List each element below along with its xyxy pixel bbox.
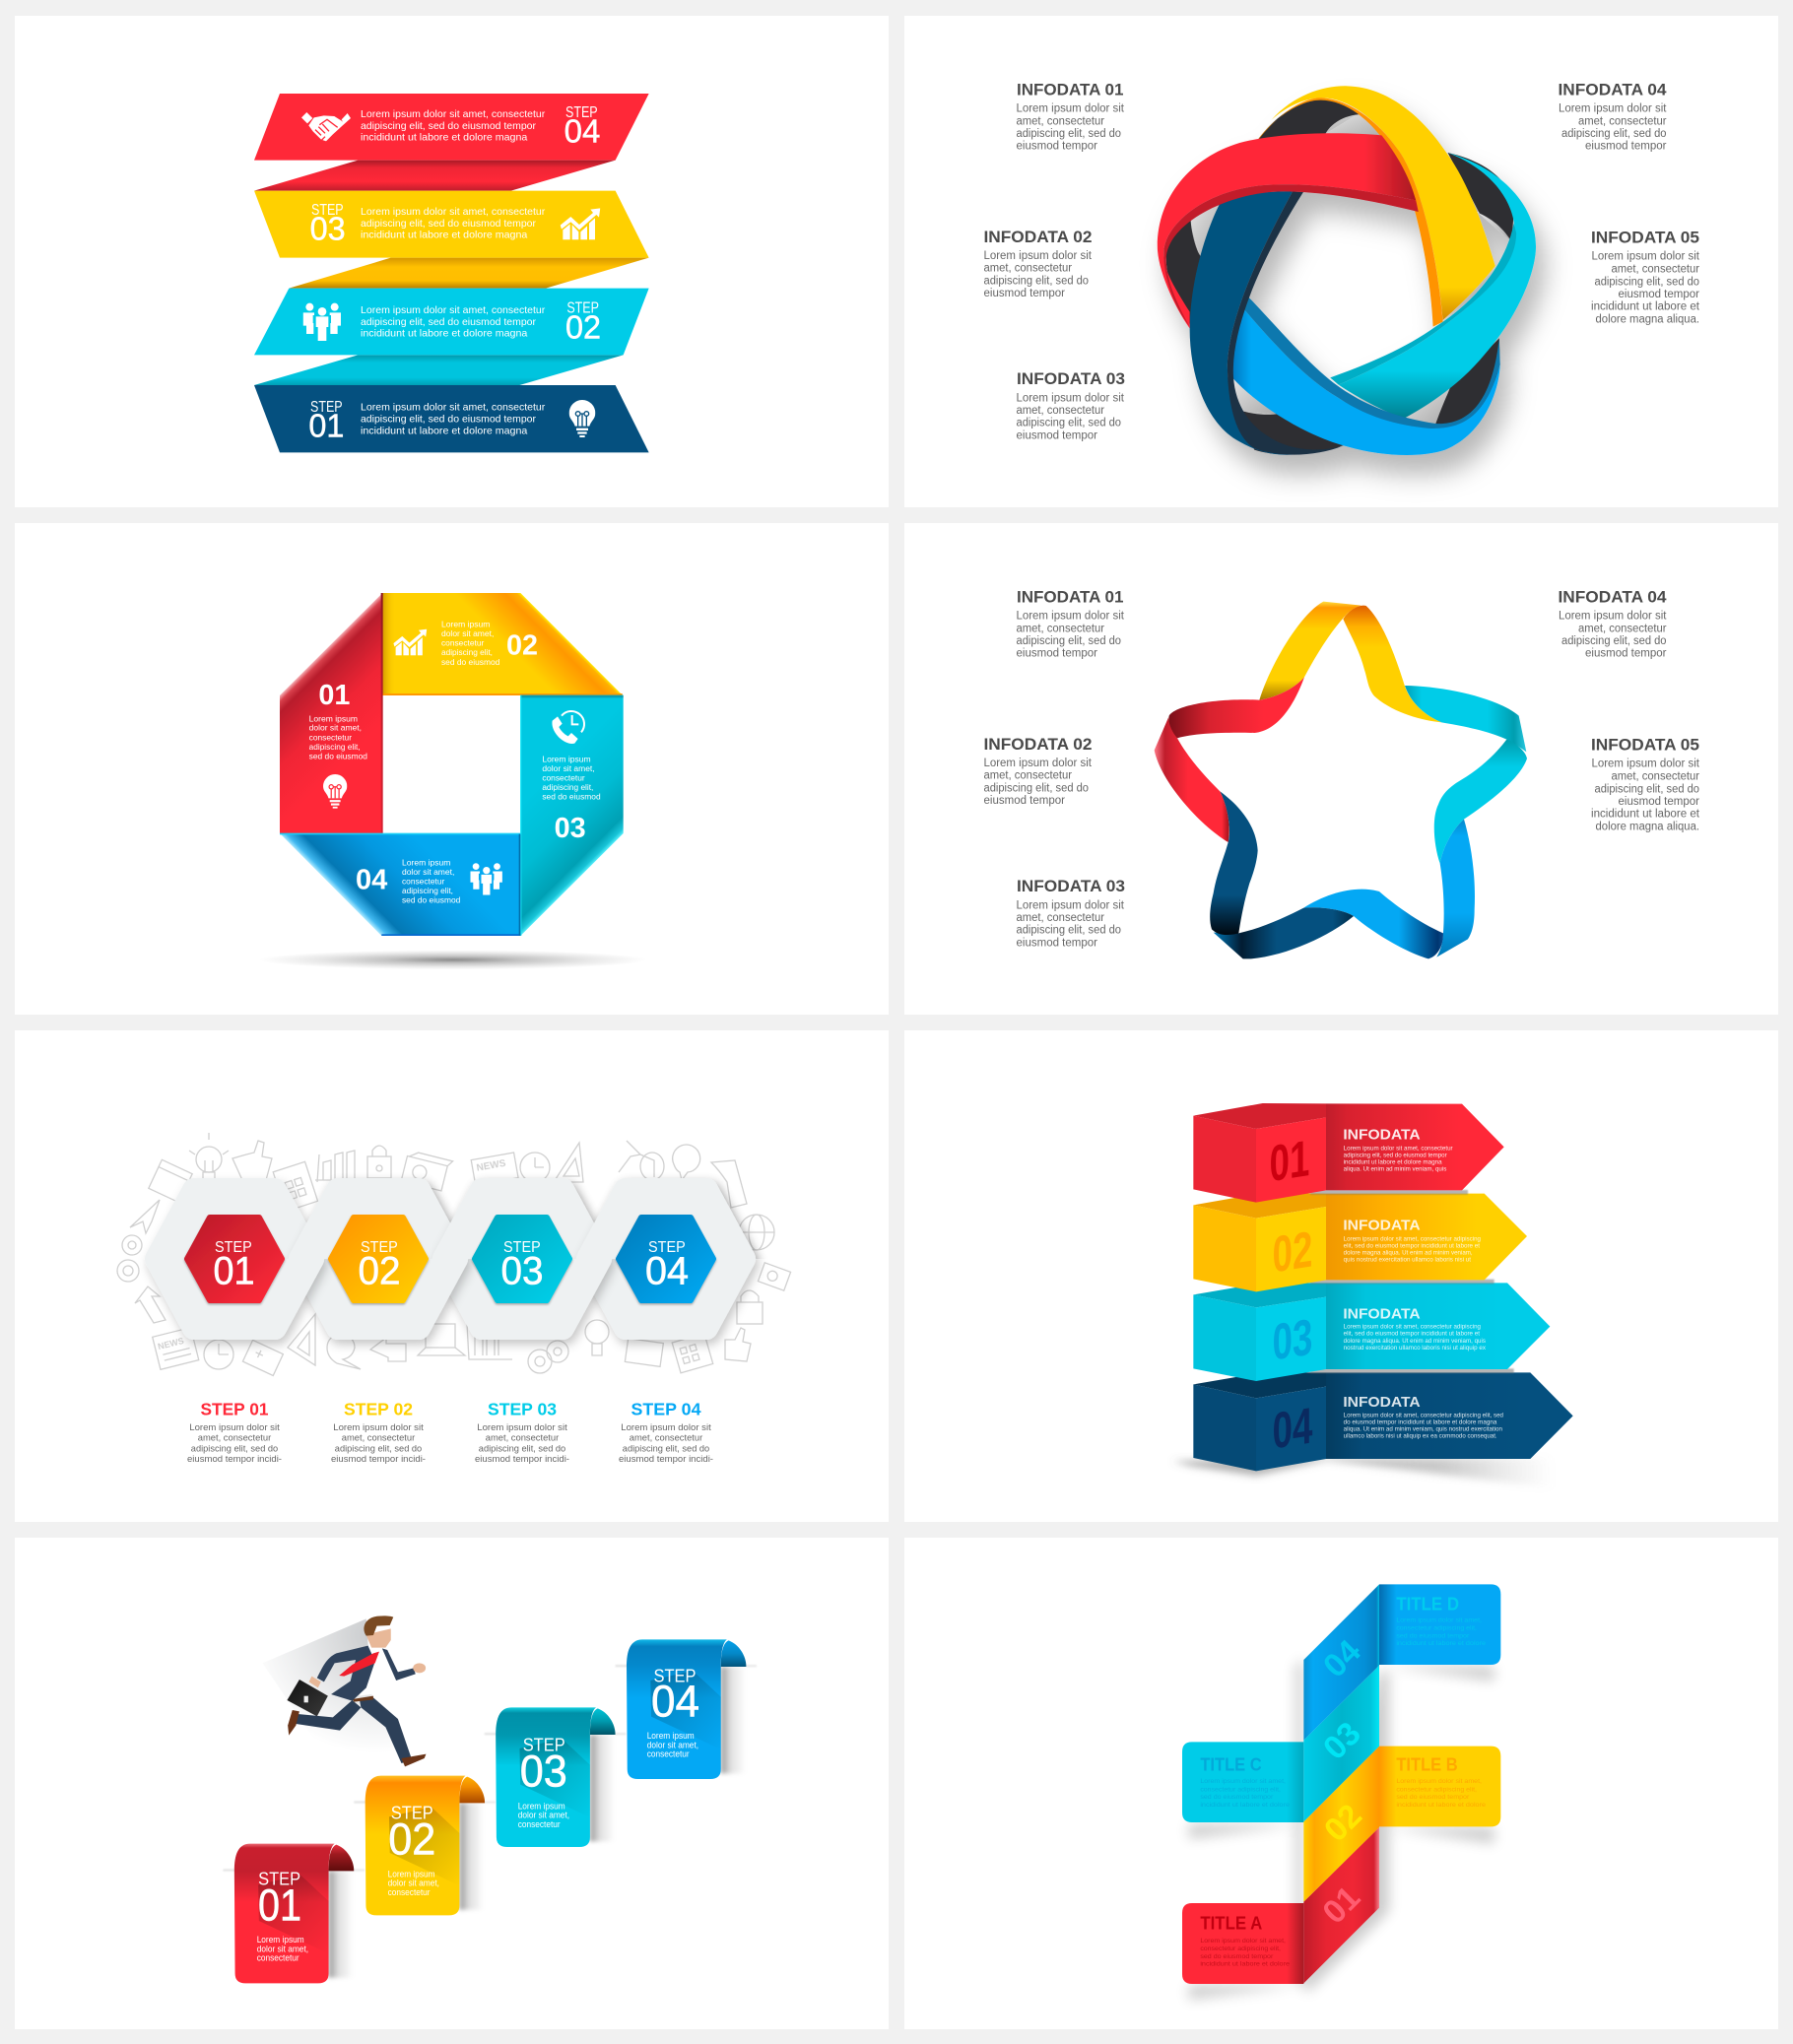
- segment text: [542, 754, 601, 802]
- caption step 01: STEP 01: [201, 1400, 269, 1419]
- text: infodata 01: INFODATA 01: [1017, 82, 1123, 99]
- hexagon step 01: STEP: [215, 1239, 252, 1256]
- ribbon step 02: [354, 1776, 496, 1915]
- caption step 01: [187, 1400, 282, 1465]
- text: infodata 05: adipiscing elit, sed do: [1594, 276, 1699, 288]
- panel: folded octagon: [15, 523, 889, 1015]
- text: infodata 02: [983, 229, 1093, 299]
- text: infodata 05: [1591, 737, 1700, 832]
- ribbon 03 text: STEP: [523, 1734, 565, 1754]
- arrow text: dolore magna aliqua. Ut enim ad minim veniam,: [1344, 1249, 1473, 1256]
- strip segment 01: [1303, 1827, 1379, 1983]
- text: infodata 05: dolore magna aliqua.: [1596, 821, 1699, 832]
- segment text: adipiscing elit,: [309, 742, 361, 752]
- ribbon 04 text: Lorem ipsum: [647, 1731, 695, 1742]
- ring band: cyan: [1330, 153, 1536, 419]
- ground shadow: [259, 950, 647, 969]
- ring band: navy: [1190, 191, 1343, 455]
- caption step 04: adipiscing elit, sed do: [623, 1443, 709, 1454]
- icon: light bulb: [323, 774, 347, 809]
- arrow text: do eiusmod tempor incididunt ut labore et dolore magna: [1344, 1419, 1497, 1426]
- band text: adipiscing elit, sed do eiusmod tempor: [361, 219, 537, 230]
- number 02: 02: [506, 630, 538, 662]
- card: title a: [1182, 1903, 1303, 1984]
- band text: [361, 109, 546, 144]
- band text: adipiscing elit, sed do eiusmod tempor: [361, 317, 537, 328]
- segment 03: teal: [520, 695, 624, 936]
- band text: incididunt ut labore et dolore magna: [361, 329, 528, 340]
- band text: [361, 403, 546, 436]
- step number 02: STEP: [566, 299, 599, 316]
- segment 01: red: [280, 593, 383, 833]
- text: infodata 04: amet, consectetur: [1578, 623, 1667, 634]
- number 03: 03: [1273, 1309, 1312, 1372]
- hexagon step 03: STEP: [503, 1239, 541, 1256]
- card: title b: Lorem ipsum dolor sit amet,: [1396, 1778, 1482, 1785]
- segment text: consectetur: [441, 638, 485, 648]
- arrow text: adipiscing elit, sed do eiusmod tempor: [1344, 1152, 1447, 1158]
- text: infodata 05: incididunt ut labore et: [1591, 301, 1700, 313]
- step number 03: STEP: [311, 202, 344, 219]
- caption step 01: eiusmod tempor incidi-: [187, 1454, 282, 1465]
- segment text: sed do eiusmod: [309, 752, 367, 761]
- number 04: 04: [1273, 1397, 1312, 1461]
- step number 01: 01: [308, 408, 344, 444]
- ribbon 01 text: [257, 1868, 308, 1964]
- ribbon 04 text: [647, 1666, 699, 1760]
- text: infodata 05: amet, consectetur: [1612, 770, 1699, 782]
- text: infodata 04: eiusmod tempor: [1585, 141, 1667, 153]
- text: infodata 04: [1559, 589, 1667, 660]
- strip segment 02: 02: [1317, 1798, 1369, 1849]
- segment text: consectetur: [309, 732, 352, 742]
- ribbon step 01: [223, 1844, 365, 1983]
- text: infodata 03: Lorem ipsum dolor sit: [1017, 899, 1125, 911]
- caption step 03: [475, 1400, 569, 1465]
- caption step 04: [619, 1400, 713, 1465]
- band: step 01: [254, 385, 649, 452]
- segment 04: blue: [280, 833, 520, 936]
- caption step 03: adipiscing elit, sed do: [479, 1443, 565, 1454]
- ring dark underside: [1165, 99, 1514, 454]
- arrow text: [1343, 1127, 1453, 1173]
- card: title c: incididunt ut labore et dolore: [1200, 1802, 1290, 1809]
- panel: woven ring: [904, 16, 1778, 507]
- icon: growth chart: [393, 629, 427, 655]
- caption step 03: eiusmod tempor incidi-: [475, 1454, 569, 1465]
- star ribbon diagram: [1155, 602, 1527, 958]
- arrow text: elit, sed do eiusmod tempor incididunt ut labore et: [1344, 1331, 1480, 1338]
- businessman figure: [287, 1615, 426, 1766]
- strip segment 04: 04: [1316, 1633, 1368, 1684]
- band text: incididunt ut labore et dolore magna: [361, 426, 528, 436]
- text: infodata 02: amet, consectetur: [983, 263, 1072, 275]
- ribbon 01 text: dolor sit amet,: [257, 1944, 308, 1954]
- panel: step ribbon bands: [15, 16, 889, 507]
- ground shadow: [1172, 1458, 1554, 1488]
- arrow text: Lorem ipsum dolor sit amet, consectetur adipiscing: [1344, 1324, 1481, 1331]
- card: title c: Lorem ipsum dolor sit amet,: [1200, 1778, 1286, 1785]
- motion shadow behind runner: [262, 1618, 405, 1793]
- icon: light bulb: [569, 400, 595, 437]
- number 03: 03: [555, 813, 586, 844]
- caption step 04: STEP 04: [631, 1400, 701, 1419]
- text: infodata 03: [1017, 370, 1125, 441]
- text: infodata 05: eiusmod tempor: [1618, 289, 1699, 300]
- text: infodata 01: Lorem ipsum dolor sit: [1017, 102, 1125, 114]
- panel: running businessman on ribbon steps: [15, 1538, 889, 2029]
- text: infodata 02: eiusmod tempor: [983, 288, 1065, 299]
- ribbon 04 text: STEP: [654, 1666, 696, 1686]
- card: title d: [1379, 1584, 1500, 1665]
- band text: adipiscing elit, sed do eiusmod tempor: [361, 121, 537, 132]
- segment text: adipiscing elit,: [402, 886, 453, 895]
- caption step 02: amet, consectetur: [342, 1433, 415, 1444]
- arrow text: [1343, 1305, 1487, 1352]
- text: infodata 05: INFODATA 05: [1591, 737, 1699, 755]
- background doodle icons: NEWS: [157, 1336, 185, 1352]
- background doodle icons: NEWS: [476, 1158, 507, 1174]
- panel: ribbon star: [904, 523, 1778, 1015]
- text: infodata 01: adipiscing elit, sed do: [1017, 128, 1121, 140]
- arrow text: Lorem ipsum dolor sit amet, consectetur adipiscing elit, sed: [1344, 1413, 1503, 1419]
- band: step 03: [254, 191, 649, 258]
- text: infodata 02: [983, 736, 1093, 807]
- text: infodata 04: [1559, 82, 1667, 153]
- background doodle icons: [117, 1133, 791, 1375]
- card: title b: [1379, 1747, 1500, 1826]
- panel: 3d box arrows: [904, 1030, 1778, 1522]
- band fold: cyan: [254, 355, 624, 385]
- ribbon 01 text: STEP: [258, 1868, 300, 1888]
- text: infodata 05: incididunt ut labore et: [1591, 809, 1700, 821]
- segment text: [402, 857, 461, 905]
- ring band: yellow: [1254, 86, 1495, 327]
- number 02: 02: [1273, 1221, 1312, 1285]
- step number 02: 02: [565, 309, 601, 346]
- text: infodata 03: eiusmod tempor: [1017, 937, 1097, 949]
- card: title d: incididunt ut labore et dolore: [1396, 1640, 1486, 1647]
- segment text: [441, 620, 500, 667]
- text: infodata 04: INFODATA 04: [1559, 82, 1667, 99]
- hexagon step 02: STEP: [361, 1239, 398, 1256]
- caption step 02: [331, 1400, 426, 1465]
- arrow text: ullamco laboris nisi ut aliquip ex ea commodo consequat.: [1344, 1433, 1497, 1440]
- text: infodata 01: adipiscing elit, sed do: [1017, 635, 1121, 647]
- card: title c: TITLE C: [1200, 1754, 1262, 1775]
- text: infodata 02: Lorem ipsum dolor sit: [983, 250, 1093, 262]
- band text: Lorem ipsum dolor sit amet, consectetur: [361, 109, 546, 120]
- ribbon 03 text: 03: [520, 1746, 567, 1796]
- ribbon 01 text: consectetur: [257, 1953, 299, 1964]
- arrow text: INFODATA: [1343, 1394, 1421, 1411]
- segment text: sed do eiusmod: [542, 792, 601, 802]
- text: infodata 05: INFODATA 05: [1591, 230, 1699, 247]
- card: title a: incididunt ut labore et dolore: [1200, 1961, 1290, 1968]
- segment text: Lorem ipsum: [309, 713, 358, 723]
- text: infodata 03: INFODATA 03: [1017, 878, 1125, 895]
- segment text: sed do eiusmod: [441, 657, 500, 667]
- segment text: dolor sit amet,: [309, 723, 362, 733]
- large hexagons: [157, 1190, 744, 1328]
- segment text: adipiscing elit,: [542, 782, 593, 792]
- step number 04: STEP: [565, 104, 598, 121]
- hexagon step 03: 03: [500, 1249, 544, 1292]
- text: infodata 03: adipiscing elit, sed do: [1017, 418, 1121, 429]
- arrow text: Lorem ipsum dolor sit amet, consectetur: [1344, 1145, 1453, 1152]
- text: infodata 05: Lorem ipsum dolor sit: [1592, 251, 1700, 263]
- arrow row 01: [1193, 1103, 1504, 1203]
- text: infodata 05: adipiscing elit, sed do: [1594, 783, 1699, 795]
- segment text: [309, 713, 367, 761]
- segment text: dolor sit amet,: [402, 867, 454, 877]
- text: infodata 01: amet, consectetur: [1017, 623, 1104, 634]
- number 01: 01: [1270, 1130, 1309, 1193]
- arrow text: aliqua. Ut enim ad minim veniam, quis nostrud exercitation: [1344, 1426, 1502, 1433]
- card: title b: sed do eiusmod tempor: [1396, 1794, 1470, 1801]
- caption step 03: Lorem ipsum dolor sit: [477, 1422, 567, 1433]
- card: title c: consectetur adipiscing elit,: [1200, 1786, 1281, 1793]
- ribbon 02 text: consectetur: [388, 1887, 431, 1898]
- ring band: red: [1158, 133, 1419, 328]
- caption step 04: amet, consectetur: [630, 1433, 702, 1444]
- band: step 02: [254, 289, 649, 355]
- strip and card shadows: [1189, 1660, 1494, 2000]
- hexagon step 04: STEP: [648, 1239, 686, 1256]
- strip segment 03: 03: [1316, 1715, 1368, 1767]
- text: infodata 02: adipiscing elit, sed do: [983, 275, 1089, 287]
- arrow text: nostrud exercitation ullamco laboris nisi ut aliquip ex: [1344, 1345, 1487, 1352]
- text: infodata 01: eiusmod tempor: [1017, 648, 1097, 660]
- card: title a: sed do eiusmod tempor: [1200, 1953, 1274, 1960]
- segment text: sed do eiusmod: [402, 895, 461, 905]
- step number 04: 04: [564, 114, 600, 151]
- arrow text: Lorem ipsum dolor sit amet, consectetur adipiscing: [1344, 1235, 1481, 1242]
- arrow text: incididunt ut labore et dolore magna: [1344, 1159, 1442, 1166]
- text: infodata 03: INFODATA 03: [1017, 370, 1125, 388]
- text: infodata 02: amet, consectetur: [983, 770, 1072, 782]
- text: infodata 05: amet, consectetur: [1612, 263, 1699, 275]
- strip segment 04: [1303, 1584, 1379, 1741]
- arrow text: elit, sed do eiusmod tempor incididunt ut labore et: [1344, 1242, 1480, 1249]
- text: infodata 03: eiusmod tempor: [1017, 429, 1097, 441]
- ribbon 02 text: 02: [388, 1814, 435, 1865]
- segment text: consectetur: [542, 773, 585, 783]
- card: title b: incididunt ut labore et dolore: [1396, 1802, 1486, 1809]
- caption step 01: amet, consectetur: [198, 1433, 271, 1444]
- text: infodata 01: INFODATA 01: [1017, 589, 1123, 607]
- ribbon step 03: [485, 1707, 626, 1847]
- segment text: Lorem ipsum: [441, 620, 490, 629]
- caption step 03: amet, consectetur: [486, 1433, 559, 1444]
- arrow text: aliqua. Ut enim ad minim veniam, quis: [1344, 1166, 1446, 1173]
- caption step 02: eiusmod tempor incidi-: [331, 1454, 426, 1465]
- ribbon 02 text: [388, 1803, 439, 1898]
- text: infodata 03: adipiscing elit, sed do: [1017, 925, 1121, 937]
- card: title b: consectetur adipiscing elit,: [1396, 1786, 1477, 1793]
- caption step 02: STEP 02: [344, 1400, 413, 1419]
- band text: incididunt ut labore et dolore magna: [361, 133, 528, 144]
- card: title a: Lorem ipsum dolor sit amet,: [1200, 1938, 1286, 1945]
- text: infodata 02: adipiscing elit, sed do: [983, 782, 1089, 794]
- number 01: 01: [318, 680, 350, 711]
- card: title b: TITLE B: [1396, 1754, 1458, 1775]
- step number 03: 03: [310, 211, 346, 247]
- text: infodata 04: adipiscing elit, sed do: [1561, 635, 1667, 647]
- card: title d: sed do eiusmod tempor: [1396, 1632, 1470, 1639]
- text: infodata 01: amet, consectetur: [1017, 115, 1104, 127]
- text: infodata 01: Lorem ipsum dolor sit: [1017, 610, 1125, 622]
- band text: [361, 305, 546, 340]
- strip segment 03: [1303, 1666, 1379, 1821]
- band text: Lorem ipsum dolor sit amet, consectetur: [361, 403, 546, 414]
- band text: incididunt ut labore et dolore magna: [361, 231, 528, 241]
- caption step 03: STEP 03: [488, 1400, 557, 1419]
- strip segment 01: 01: [1316, 1879, 1367, 1931]
- ribbon 04 text: consectetur: [647, 1749, 690, 1760]
- text: infodata 03: amet, consectetur: [1017, 405, 1104, 417]
- hexagon step 02: [331, 1218, 426, 1300]
- ribbon 01 text: 01: [258, 1879, 301, 1930]
- band text: Lorem ipsum dolor sit amet, consectetur: [361, 305, 546, 316]
- caption step 04: Lorem ipsum dolor sit: [621, 1422, 711, 1433]
- ribbon 02 text: dolor sit amet,: [388, 1879, 439, 1889]
- card: title a: consectetur adipiscing elit,: [1200, 1945, 1281, 1952]
- ribbon 02 text: Lorem ipsum: [388, 1869, 435, 1879]
- step number 01: STEP: [310, 399, 343, 416]
- caption step 04: eiusmod tempor incidi-: [619, 1454, 713, 1465]
- ribbon 03 text: consectetur: [518, 1819, 561, 1830]
- hexagon step 01: [187, 1218, 282, 1300]
- text: infodata 04: INFODATA 04: [1559, 589, 1667, 607]
- caption step 02: Lorem ipsum dolor sit: [333, 1422, 424, 1433]
- text: infodata 04: Lorem ipsum dolor sit: [1559, 610, 1667, 622]
- icon: phone and clock: [552, 711, 584, 744]
- text: infodata 03: Lorem ipsum dolor sit: [1017, 392, 1125, 404]
- band text: Lorem ipsum dolor sit amet, consectetur: [361, 207, 546, 218]
- band fold: red: [254, 161, 616, 191]
- segment 02: yellow: [382, 593, 623, 695]
- text: infodata 03: [1017, 878, 1125, 949]
- band: step 04: [254, 94, 649, 161]
- ribbon 03 text: dolor sit amet,: [518, 1811, 569, 1821]
- hexagon step 02: 02: [359, 1249, 400, 1292]
- strip segment 02: [1303, 1747, 1379, 1902]
- hexagon step 01: 01: [213, 1249, 254, 1292]
- band text: [361, 207, 546, 241]
- ribbon 03 text: [518, 1734, 569, 1830]
- arrow row 04: [1193, 1372, 1573, 1471]
- icon: people: [303, 303, 341, 341]
- text: infodata 01: [1017, 589, 1125, 660]
- card: title d: Lorem ipsum dolor sit amet,: [1396, 1617, 1482, 1624]
- card: title c: sed do eiusmod tempor: [1200, 1794, 1274, 1801]
- icon: people: [470, 863, 502, 895]
- panel: hexagon chain: [15, 1030, 889, 1522]
- number 04: 04: [356, 864, 387, 895]
- text: infodata 04: eiusmod tempor: [1585, 648, 1667, 660]
- hexagon step 04: [619, 1218, 713, 1300]
- ring band: blue: [1232, 296, 1500, 455]
- text: infodata 05: Lorem ipsum dolor sit: [1592, 758, 1700, 770]
- card: title a: TITLE A: [1200, 1912, 1262, 1933]
- segment text: dolor sit amet,: [542, 763, 595, 773]
- arrow text: dolore magna aliqua. Ut enim ad minim veniam, quis: [1344, 1338, 1486, 1345]
- text: infodata 02: eiusmod tempor: [983, 795, 1065, 807]
- arrow text: [1343, 1218, 1481, 1264]
- band text: adipiscing elit, sed do eiusmod tempor: [361, 415, 537, 426]
- segment text: adipiscing elit,: [441, 647, 493, 657]
- arrow text: INFODATA: [1343, 1305, 1421, 1322]
- ribbon 02 text: STEP: [391, 1803, 433, 1823]
- ring gaps in shadow: [1189, 113, 1514, 425]
- text: infodata 02: INFODATA 02: [983, 229, 1092, 246]
- text: infodata 04: amet, consectetur: [1578, 115, 1667, 127]
- text: infodata 01: eiusmod tempor: [1017, 141, 1097, 153]
- caption step 02: adipiscing elit, sed do: [335, 1443, 422, 1454]
- caption step 01: adipiscing elit, sed do: [191, 1443, 278, 1454]
- arrow row 02: [1193, 1193, 1527, 1291]
- segment text: Lorem ipsum: [542, 754, 591, 763]
- icon: handshake: [301, 112, 351, 141]
- text: infodata 05: dolore magna aliqua.: [1596, 313, 1699, 325]
- arrow row 03: [1193, 1283, 1550, 1381]
- card: title d: consectetur adipiscing elit,: [1396, 1625, 1477, 1632]
- text: infodata 02: Lorem ipsum dolor sit: [983, 758, 1093, 769]
- icon: growth chart: [561, 208, 600, 239]
- hexagon step 04: 04: [645, 1249, 689, 1292]
- arrow text: INFODATA: [1343, 1218, 1421, 1234]
- ribbon 03 text: Lorem ipsum: [518, 1801, 565, 1812]
- caption step 01: Lorem ipsum dolor sit: [189, 1422, 280, 1433]
- text: infodata 02: INFODATA 02: [983, 736, 1092, 754]
- text: infodata 04: Lorem ipsum dolor sit: [1559, 102, 1667, 114]
- text: infodata 01: [1017, 82, 1125, 153]
- segment text: dolor sit amet,: [441, 628, 494, 638]
- arrow text: [1343, 1394, 1503, 1440]
- band fold: yellow: [289, 258, 649, 289]
- segment text: consectetur: [402, 877, 445, 887]
- ribbon 04 text: 04: [651, 1676, 699, 1726]
- arrow text: INFODATA: [1343, 1127, 1421, 1144]
- card: title d: TITLE D: [1396, 1593, 1459, 1614]
- text: infodata 05: eiusmod tempor: [1618, 796, 1699, 808]
- hexagon step 03: [475, 1218, 569, 1300]
- ribbon 01 text: Lorem ipsum: [257, 1935, 304, 1945]
- card: title c: [1182, 1742, 1303, 1822]
- arrow text: quis nostrud exercitation ullamco laboris nisi ut: [1344, 1257, 1471, 1264]
- text: infodata 05: [1591, 230, 1700, 325]
- segment text: Lorem ipsum: [402, 857, 450, 867]
- text: infodata 04: adipiscing elit, sed do: [1561, 128, 1667, 140]
- panel: zigzag folded strip: [904, 1538, 1778, 2029]
- text: infodata 03: amet, consectetur: [1017, 912, 1104, 924]
- ribbon step 04: [616, 1639, 757, 1779]
- ribbon 04 text: dolor sit amet,: [647, 1740, 698, 1750]
- woven ring diagram: [1158, 86, 1536, 455]
